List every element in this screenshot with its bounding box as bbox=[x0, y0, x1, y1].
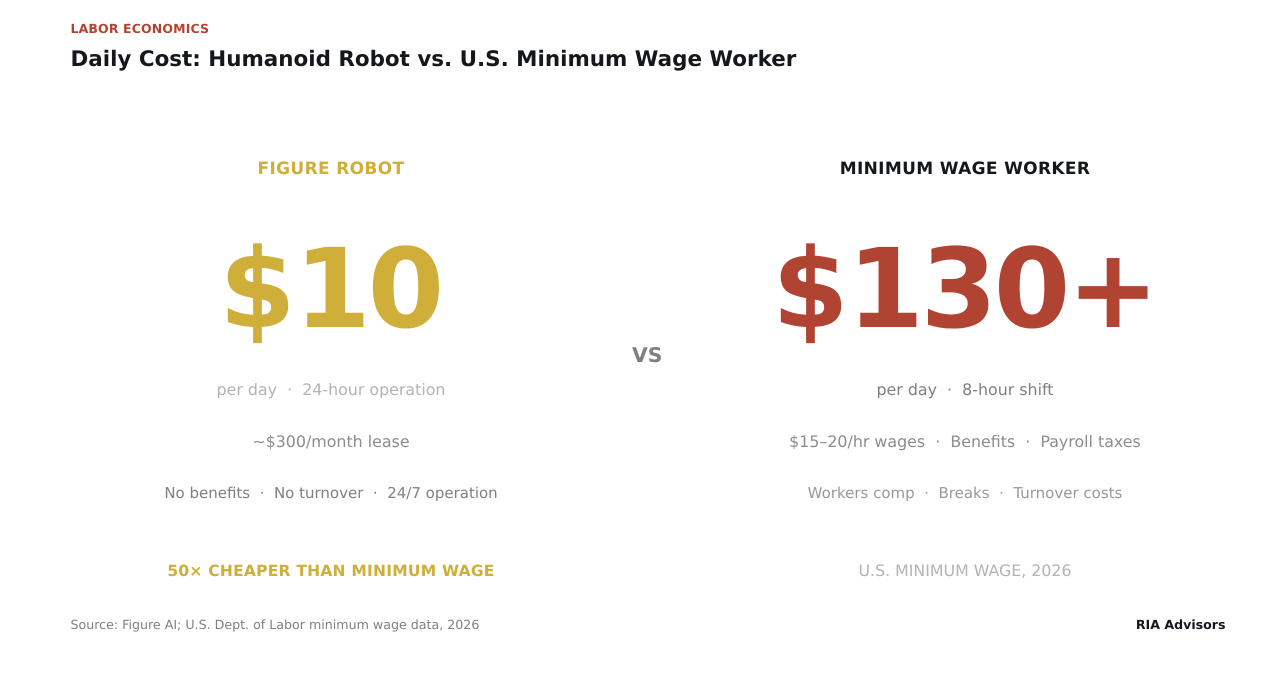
worker wage costs: $15–20/hr wages · Benefits · Payroll taxes bbox=[789, 432, 1141, 451]
kicker: labor economics: LABOR ECONOMICS bbox=[70, 21, 209, 36]
robot lease: ~$300/month lease bbox=[252, 432, 410, 451]
vs label: VS bbox=[632, 343, 662, 367]
robot daily cost: $10 bbox=[219, 225, 441, 353]
panel: minimum wage worker bbox=[772, 159, 1156, 580]
title: Daily Cost: Humanoid Robot vs. U.S. Minimum Wage Worker bbox=[70, 46, 796, 72]
worker other costs: Workers comp · Breaks · Turnover costs bbox=[808, 484, 1122, 502]
source note: Source: Figure AI; U.S. Dept. of Labor minimum wage data, 2026 bbox=[70, 617, 479, 632]
robot cost basis: per day · 24-hour operation bbox=[217, 380, 445, 399]
worker cost basis: per day · 8-hour shift bbox=[876, 380, 1054, 399]
robot panel heading: FIGURE ROBOT bbox=[258, 159, 404, 179]
worker footnote: U.S. MINIMUM WAGE, 2026 bbox=[858, 561, 1072, 580]
worker daily cost: $130+ bbox=[772, 225, 1156, 353]
robot benefits: No benefits · No turnover · 24/7 operation bbox=[164, 484, 498, 502]
panel: figure robot bbox=[164, 159, 498, 580]
robot callout: 50× CHEAPER THAN MINIMUM WAGE bbox=[167, 562, 495, 580]
brand: RIA Advisors bbox=[1136, 617, 1226, 632]
worker panel heading: MINIMUM WAGE WORKER bbox=[840, 159, 1090, 179]
